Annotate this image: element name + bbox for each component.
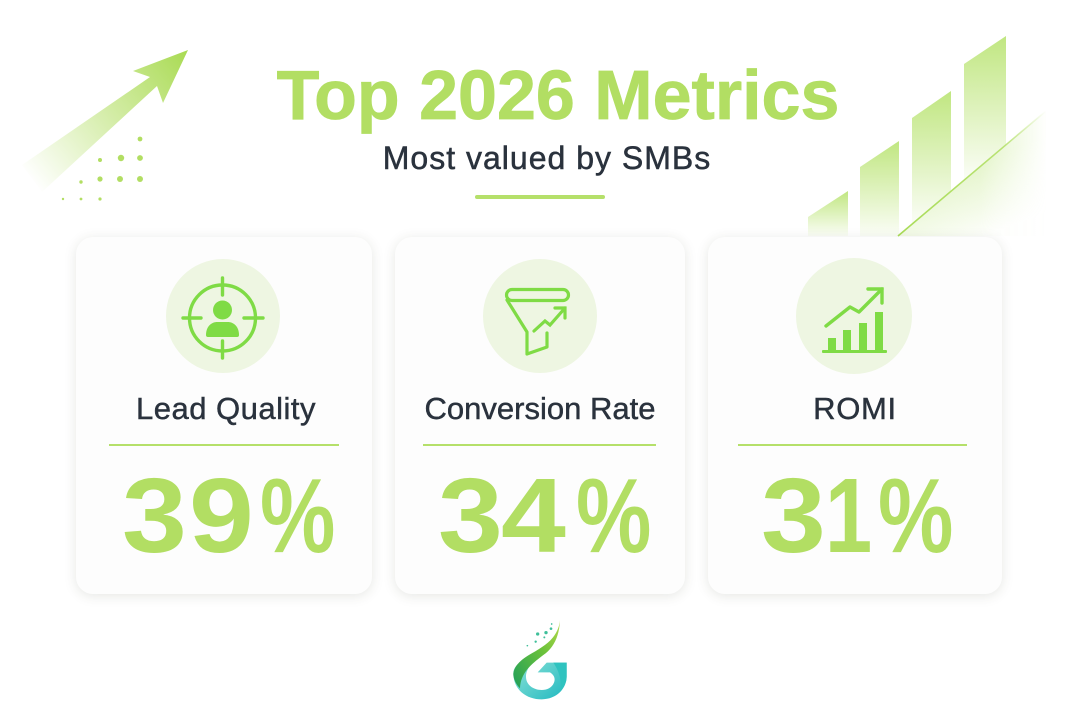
value bbox=[122, 457, 335, 575]
decorative bar chart: top right bbox=[808, 36, 1046, 236]
panel: Conversion Rate bbox=[395, 237, 685, 594]
value: 1 bbox=[825, 457, 872, 575]
value: 3 bbox=[122, 457, 187, 575]
label: ROMI bbox=[813, 391, 897, 426]
value bbox=[438, 457, 651, 575]
decorative arrow: top left bbox=[22, 50, 188, 192]
value: 3 bbox=[761, 457, 826, 575]
icon: funnel with arrow bbox=[483, 259, 597, 373]
value bbox=[761, 457, 953, 575]
icon: target with person bbox=[166, 259, 280, 373]
divider bbox=[738, 444, 967, 446]
title: Top 2026 Metrics bbox=[277, 56, 839, 134]
title underline bbox=[475, 195, 605, 198]
value: % bbox=[576, 457, 651, 575]
label: Conversion Rate bbox=[425, 391, 655, 426]
label: Lead Quality bbox=[136, 391, 316, 426]
logo bbox=[513, 620, 567, 700]
value: 4 bbox=[501, 457, 566, 575]
panel: Lead Quality bbox=[76, 237, 372, 594]
value: 9 bbox=[189, 457, 254, 575]
icon: rising bar chart bbox=[796, 258, 912, 374]
divider bbox=[109, 444, 339, 446]
value: % bbox=[878, 457, 953, 575]
decorative dot pattern bbox=[62, 137, 143, 201]
value: % bbox=[260, 457, 335, 575]
value: 3 bbox=[438, 457, 503, 575]
panel: ROMI bbox=[708, 237, 1002, 594]
subtitle: Most valued by SMBs bbox=[383, 140, 711, 176]
divider bbox=[423, 444, 656, 446]
